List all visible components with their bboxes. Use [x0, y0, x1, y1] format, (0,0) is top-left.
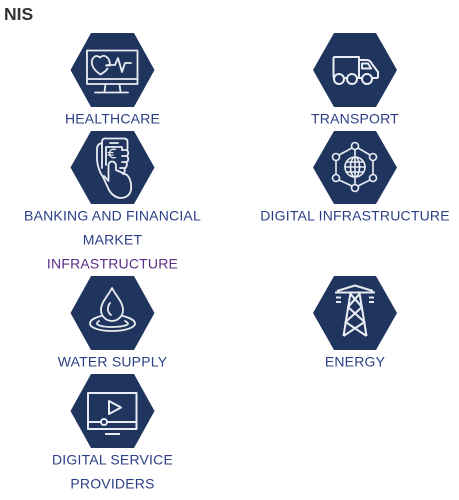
digital service providers item [52, 374, 173, 492]
icon: globe network [332, 142, 376, 192]
hexagon: energy [313, 276, 397, 350]
healthcare item [65, 33, 160, 126]
label: energy: ENERGY [325, 354, 386, 370]
label: digital infrastructure: DIGITAL INFRASTRUCTURE [260, 208, 450, 224]
hexagon: healthcare [70, 33, 154, 107]
label: banking and financial market infrastructure: BANKING AND FINANCIAL [24, 208, 201, 224]
hexagon: transport [313, 33, 397, 107]
icon: power pylon [335, 286, 375, 336]
icon: monitor with heart [87, 50, 138, 92]
hexagon: digital infrastructure [313, 131, 397, 204]
title: NIS [4, 4, 33, 24]
hexagon: banking [70, 131, 154, 204]
digital service providers item: PROVIDERS [70, 476, 155, 492]
banking item: MARKET [83, 232, 143, 248]
banking item: INFRASTRUCTURE [47, 256, 178, 272]
hexagon: water supply [70, 276, 154, 350]
label: water supply: WATER SUPPLY [58, 354, 168, 370]
banking item [24, 131, 201, 272]
energy item [313, 276, 397, 370]
icon: truck [334, 57, 378, 84]
label: digital service providers: DIGITAL SERVICE [52, 452, 173, 468]
transport item [311, 33, 399, 126]
digital infrastructure item [260, 131, 450, 224]
icon: water drop [90, 288, 135, 331]
hexagon: digital service providers [70, 374, 154, 448]
icon: hand holding phone [97, 138, 131, 198]
icon: video screen [88, 393, 136, 434]
water supply item [58, 276, 168, 370]
label: transport: TRANSPORT [311, 110, 399, 126]
label: healthcare: HEALTHCARE [65, 110, 160, 126]
